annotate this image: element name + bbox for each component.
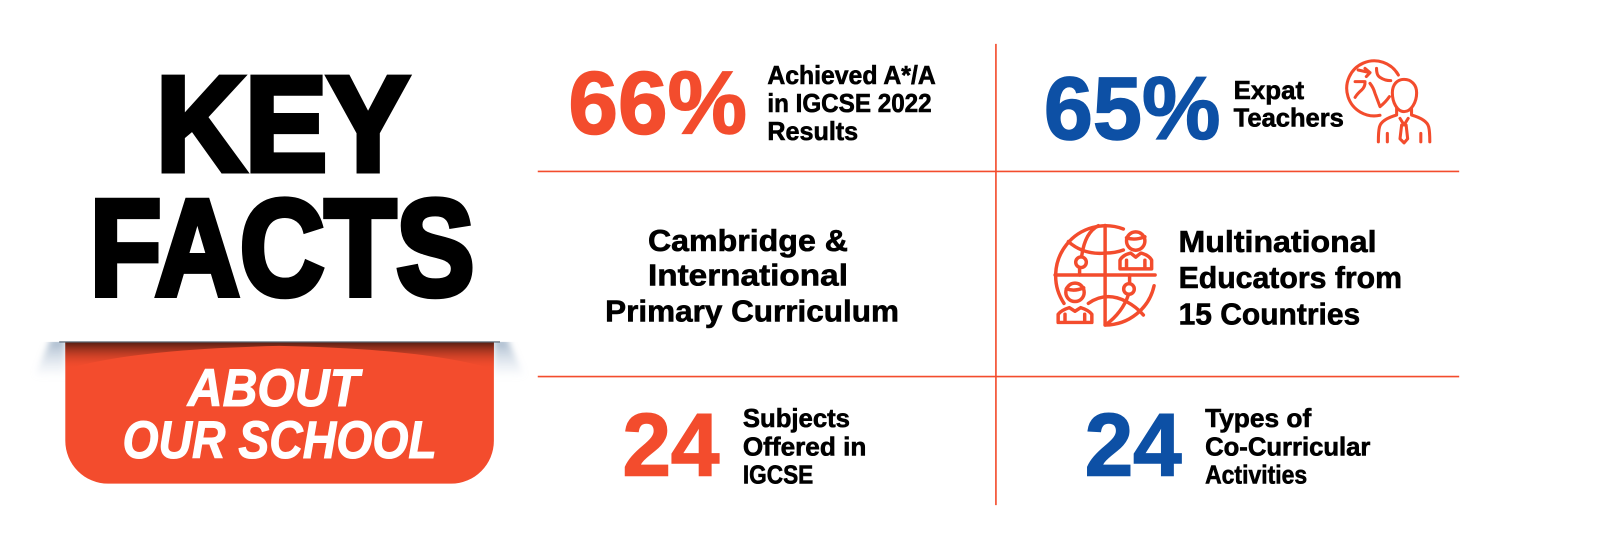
- ribbon: about our school: OUR SCHOOL: [122, 411, 437, 470]
- stat: 24 co-curricular: Types of: [1205, 405, 1312, 433]
- stat: 24 subjects: IGCSE: [743, 462, 813, 490]
- text: multinational educators: [1179, 226, 1402, 331]
- stat: 24 co-curricular: Activities: [1205, 462, 1307, 490]
- text: cambridge curriculum: International: [648, 260, 848, 293]
- stat: 65% expat teachers: [1044, 59, 1344, 158]
- text: multinational educators: Educators from: [1179, 262, 1402, 295]
- stat: 65% expat teachers: 65%: [1044, 59, 1220, 158]
- stat: 65% expat teachers: Teachers: [1234, 105, 1344, 133]
- stat: 24 subjects: [622, 396, 866, 495]
- title: key facts: FACTS: [90, 171, 474, 324]
- stat: 24 co-curricular: Co-Curricular: [1205, 434, 1370, 462]
- text: cambridge curriculum: Primary Curriculum: [605, 295, 899, 328]
- text: cambridge curriculum: Cambridge &: [648, 225, 848, 258]
- icon: globe and teacher: [1347, 61, 1430, 143]
- stat: 24 subjects: Subjects: [743, 405, 850, 433]
- icon: globe with educators: [1055, 226, 1155, 325]
- stat: 66% achieved: [568, 54, 936, 153]
- text: multinational educators: 15 Countries: [1179, 298, 1360, 331]
- stat: 66% achieved: Achieved A*/A: [767, 62, 936, 90]
- ribbon: about our school: ABOUT: [186, 359, 363, 418]
- stat: 66% achieved: Results: [767, 118, 858, 146]
- stat: 24 co-curricular: [1085, 396, 1370, 495]
- stat: 65% expat teachers: Expat: [1234, 77, 1305, 105]
- text: multinational educators: Multinational: [1179, 226, 1377, 259]
- stat: 24 subjects: Offered in: [743, 434, 866, 462]
- stat: 66% achieved: 66%: [568, 54, 747, 153]
- stat: 24 subjects: 24: [622, 396, 719, 495]
- grid lines: [538, 44, 1459, 505]
- title: key facts: KEY: [156, 48, 409, 199]
- title: key facts: [90, 48, 474, 324]
- text: cambridge curriculum: [605, 225, 899, 328]
- ribbon: about our school: [35, 339, 524, 484]
- stat: 24 co-curricular: 24: [1085, 396, 1182, 495]
- stat: 66% achieved: in IGCSE 2022: [767, 90, 932, 118]
